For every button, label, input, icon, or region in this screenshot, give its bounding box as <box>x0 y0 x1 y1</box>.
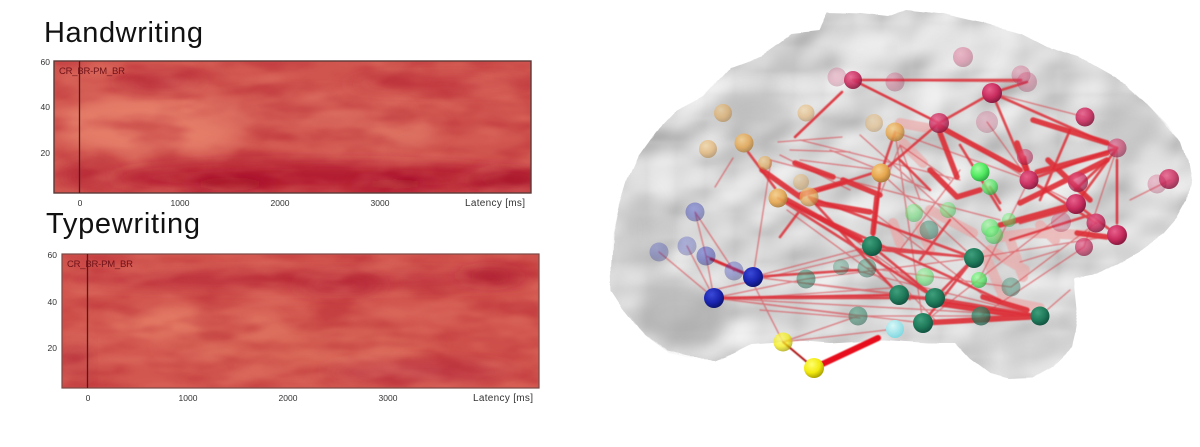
pale pink wash edges <box>893 123 1090 308</box>
node cluster: bright green <box>905 162 1016 288</box>
y axis labels: 40 <box>41 102 50 112</box>
node cluster: yellow <box>774 332 824 378</box>
heatmap field: handwriting <box>54 61 550 194</box>
node cluster: crimson <box>828 47 1179 256</box>
x axis labels: 3000 <box>379 393 398 403</box>
x axis labels: 2000 <box>279 393 298 403</box>
x axis labels: 0 <box>78 198 83 208</box>
chart: handwriting heatmap <box>41 57 550 209</box>
x axis labels: 1000 <box>179 393 198 403</box>
heatmap field: typewriting <box>60 254 540 388</box>
y axis labels: 60 <box>48 250 57 260</box>
node cluster: orange <box>699 104 904 208</box>
frame and zero line <box>54 61 531 193</box>
frame and zero line <box>62 254 539 388</box>
x axis labels: Latency [ms] <box>473 393 533 404</box>
node: cyan <box>886 320 904 338</box>
thin pale edges <box>659 80 1170 342</box>
x axis labels: 1000 <box>171 198 190 208</box>
heatmap label: CR_BR-PM_BR <box>59 66 125 77</box>
y axis labels: 20 <box>48 343 57 353</box>
y axis labels: 60 <box>41 57 50 67</box>
thick edges <box>762 120 1107 323</box>
yellow node edges <box>783 342 814 368</box>
node cluster: blue <box>650 202 763 308</box>
y axis labels: 40 <box>48 297 57 307</box>
medium edges <box>714 80 1117 323</box>
chart: typewriting heatmap <box>48 250 540 404</box>
node cluster: dark green <box>796 220 1050 333</box>
x axis labels: 3000 <box>371 198 390 208</box>
y axis labels <box>41 57 50 158</box>
blue node edge <box>711 259 753 277</box>
x axis labels: 2000 <box>271 198 290 208</box>
network edges <box>659 80 1170 368</box>
y axis labels <box>48 250 57 353</box>
y axis labels: 20 <box>41 148 50 158</box>
x axis labels: Latency [ms] <box>465 198 525 209</box>
x axis labels: 0 <box>86 393 91 403</box>
x axis labels <box>86 393 533 404</box>
translucent brain shell <box>611 10 1190 378</box>
heading: Handwriting: Handwriting <box>44 17 203 49</box>
brain network figure <box>611 10 1190 378</box>
heading: Typewriting: Typewriting <box>46 208 200 240</box>
x axis labels <box>78 198 525 209</box>
heatmap label: CR_BR-PM_BR <box>67 259 133 270</box>
